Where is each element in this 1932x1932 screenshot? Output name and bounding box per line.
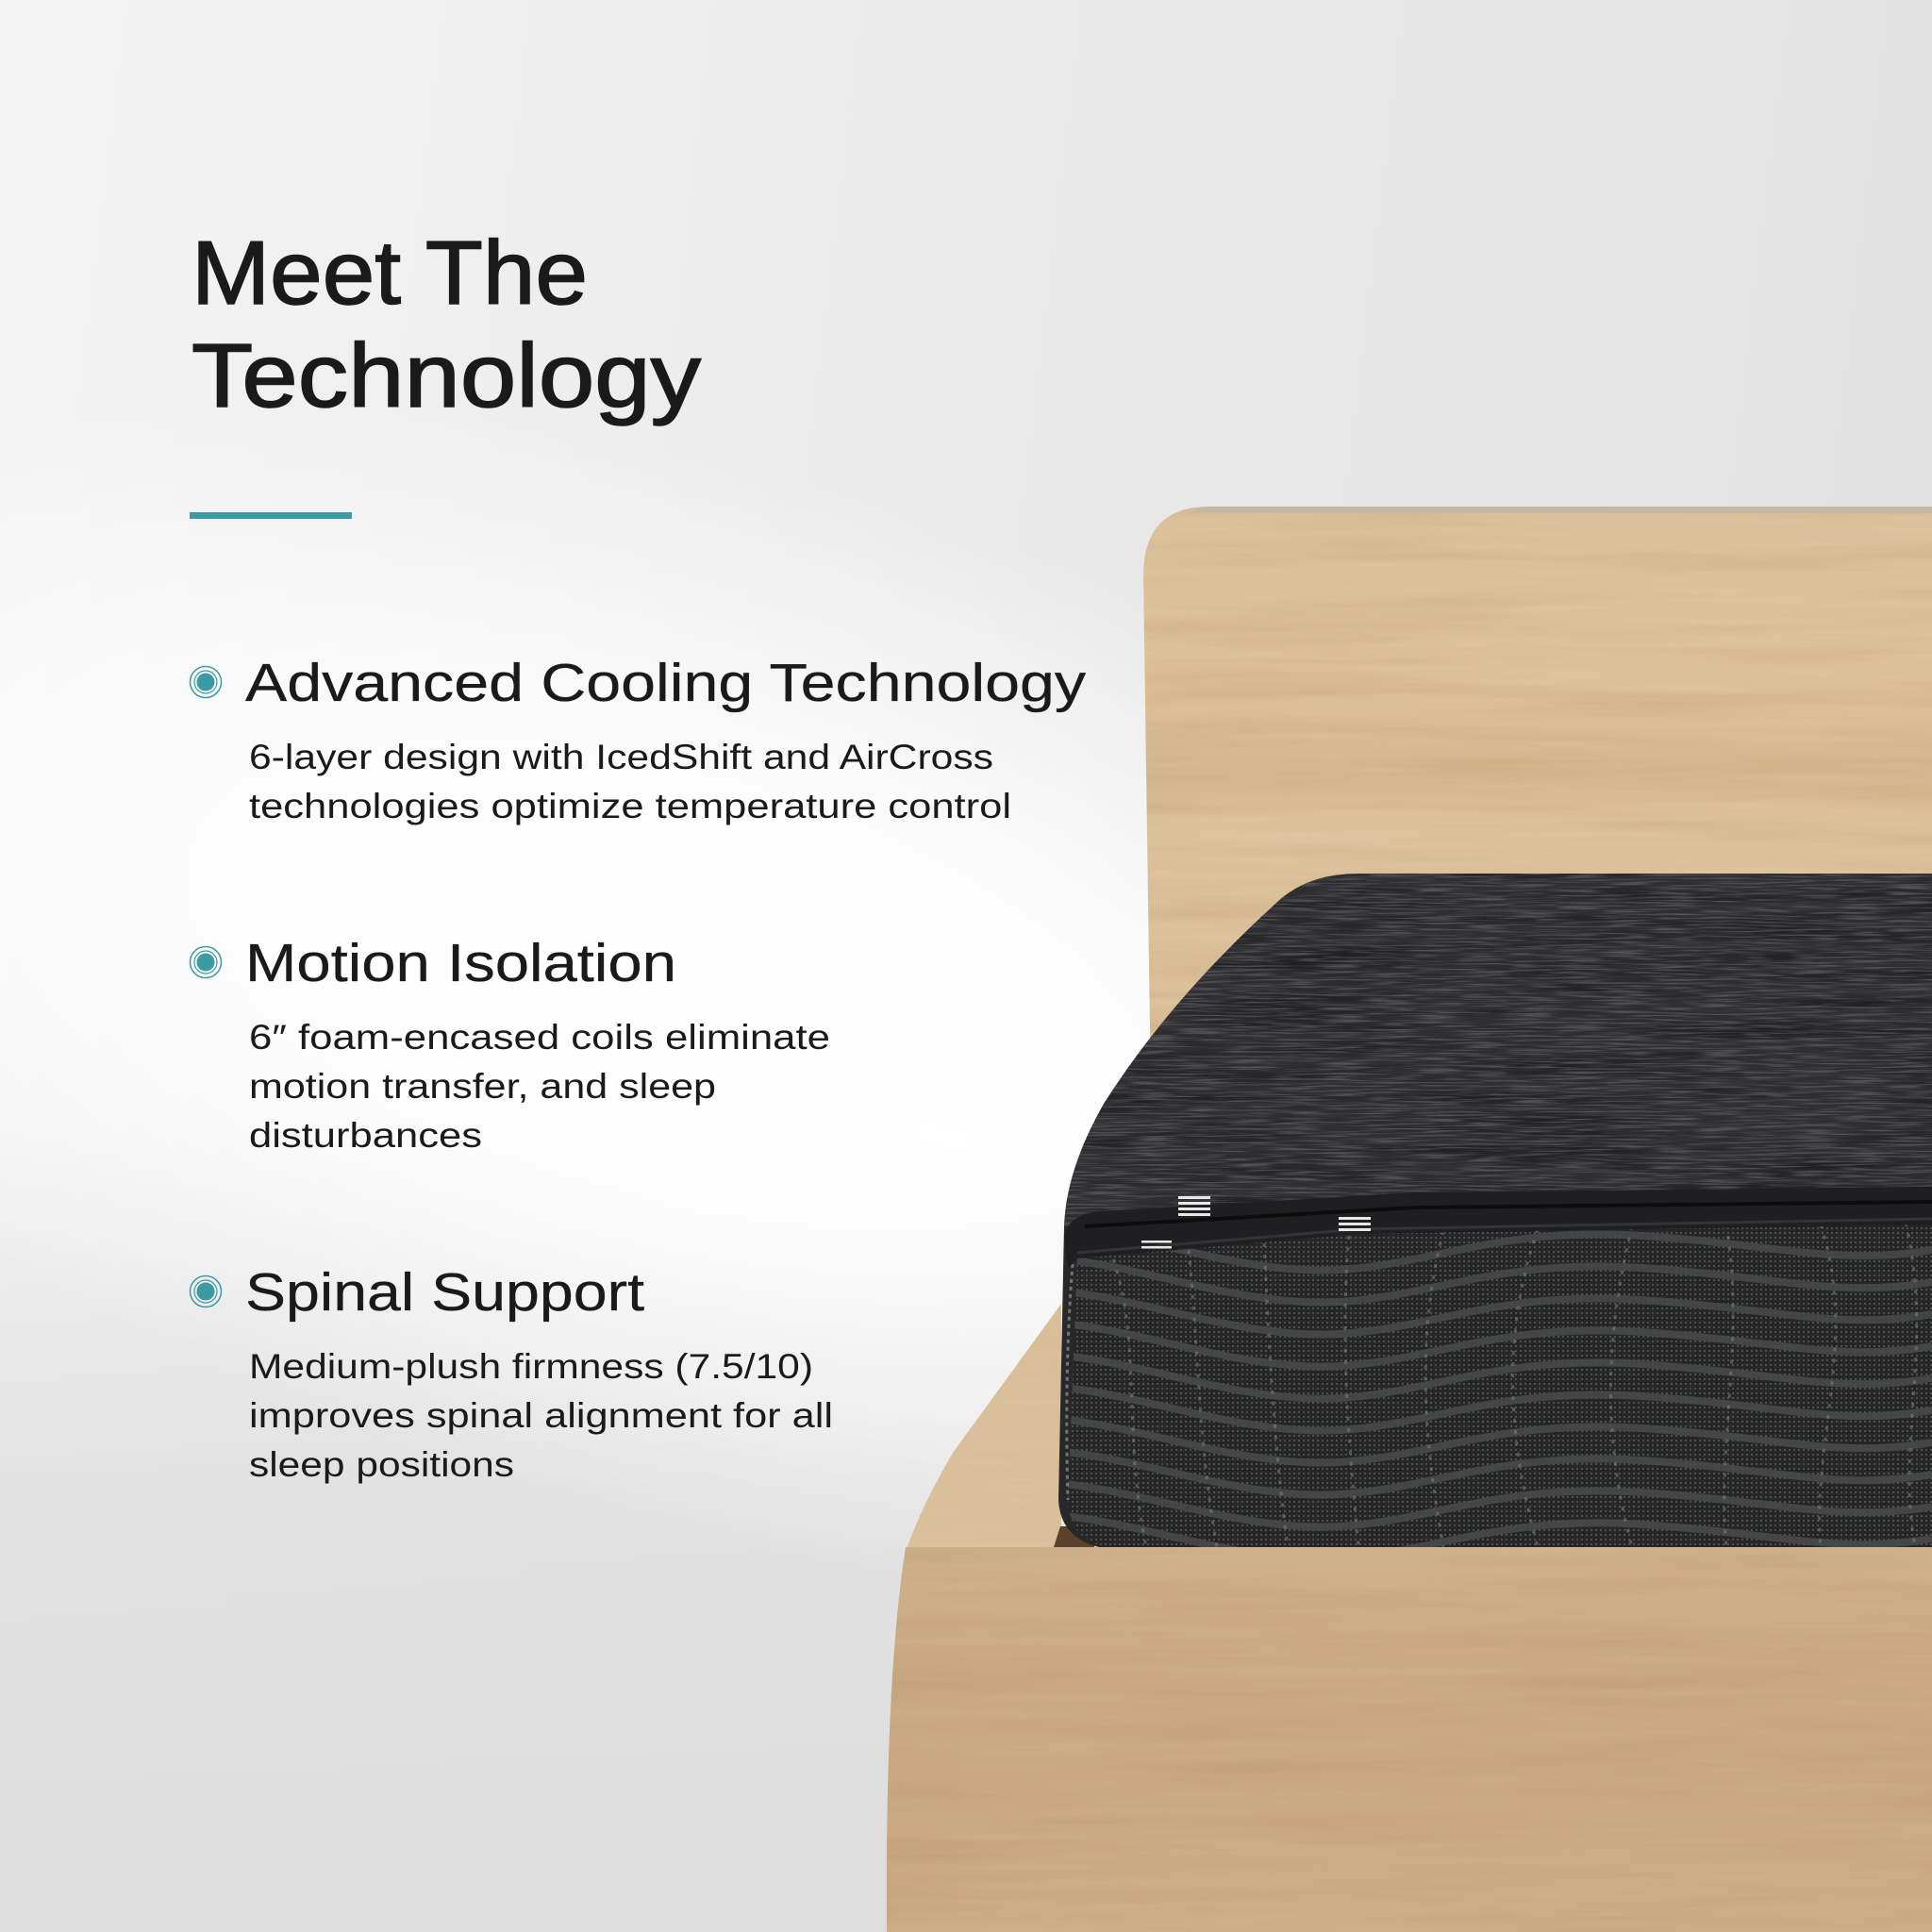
title accent divider — [190, 512, 352, 519]
footboard panel — [877, 1547, 1932, 1932]
heading: motion isolation: Motion Isolation — [245, 933, 676, 993]
title: Technology — [192, 325, 701, 426]
description: motion isolation — [249, 1018, 830, 1155]
heading: cooling: Advanced Cooling Technology — [245, 653, 1087, 713]
icon: teal target bullet — [191, 666, 221, 698]
mattress border band — [1064, 1187, 1932, 1269]
icon: teal target bullet — [191, 1275, 221, 1307]
description: spinal support — [249, 1347, 833, 1484]
description: motion isolation: 6″ foam-encased coils eliminate — [249, 1018, 830, 1057]
feature: motion isolation — [191, 933, 830, 1155]
description: cooling: 6-layer design with IcedShift and AirCross — [249, 738, 993, 776]
description: motion isolation: disturbances — [249, 1116, 482, 1155]
description: cooling: technologies optimize temperature control — [249, 787, 1011, 825]
headboard — [1143, 507, 1932, 1038]
bed side rail — [908, 1304, 1061, 1547]
feature: spinal support — [191, 1262, 833, 1484]
feature: cooling — [191, 653, 1087, 825]
title: Meet The — [192, 223, 588, 324]
mattress front fabric — [1057, 1198, 1932, 1591]
mattress — [1057, 868, 1932, 1591]
title — [192, 223, 701, 426]
gap shadow under mattress — [1054, 1526, 1094, 1547]
description: spinal support: improves spinal alignment for all — [249, 1396, 833, 1435]
left text column — [190, 223, 1087, 1484]
heading: spinal support: Spinal Support — [245, 1262, 644, 1323]
description: motion isolation: motion transfer, and sleep — [249, 1067, 716, 1106]
mattress top surface — [1057, 868, 1932, 1236]
icon: teal target bullet — [191, 947, 221, 977]
bed frame — [877, 500, 1932, 1932]
description: cooling — [249, 738, 1011, 825]
description: spinal support: Medium-plush firmness (7.5/10) — [249, 1347, 813, 1386]
woven tags — [1141, 1196, 1371, 1249]
description: spinal support: sleep positions — [249, 1445, 514, 1484]
